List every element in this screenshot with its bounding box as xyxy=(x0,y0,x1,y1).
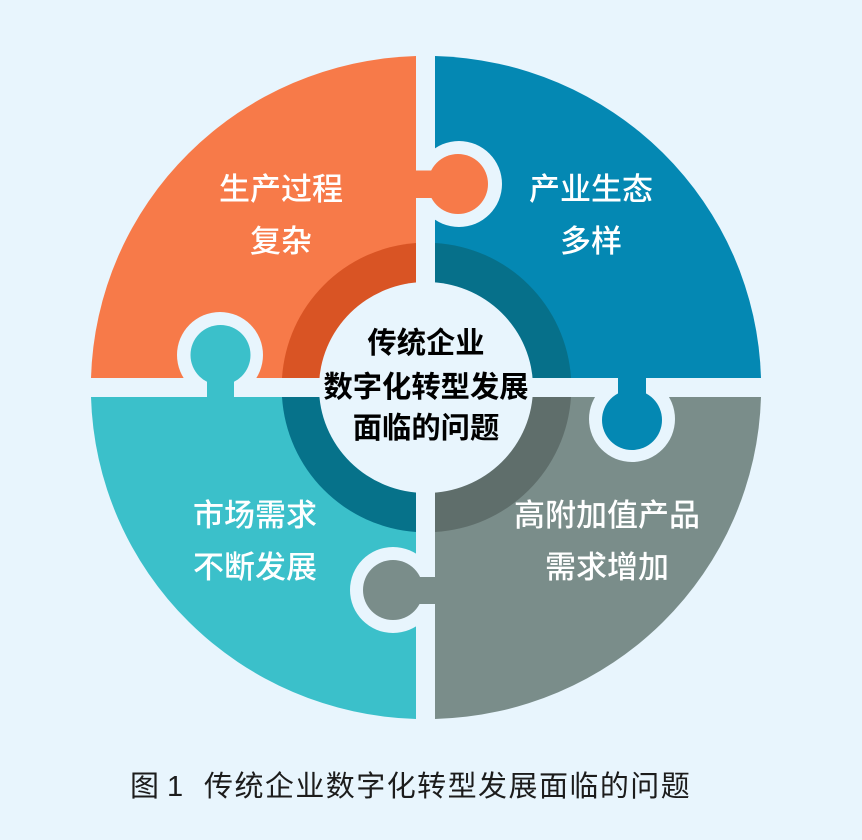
center circle xyxy=(319,282,533,493)
caption: 传统企业数字化转型发展面临的问题 xyxy=(204,770,691,803)
icon: cyan puzzle knob xyxy=(190,325,250,399)
label: market demand: 不断发展 xyxy=(193,550,317,585)
center text: 传统企业 xyxy=(367,327,485,360)
label: high value products: 需求增加 xyxy=(545,550,669,585)
label: high value products: 高附加值产品 xyxy=(514,498,700,533)
label: market demand xyxy=(193,498,317,585)
label: industry ecosystem: 产业生态 xyxy=(529,172,653,207)
label: production process: 生产过程 xyxy=(219,172,343,207)
icon: orange puzzle knob xyxy=(414,154,488,214)
label: industry ecosystem xyxy=(529,172,653,259)
label: production process xyxy=(219,172,343,259)
icon: blue puzzle knob xyxy=(602,376,662,450)
panel: grey quadrant xyxy=(435,376,761,719)
center text: 面临的问题 xyxy=(353,412,499,445)
label: production process: 复杂 xyxy=(250,224,312,259)
icon: grey puzzle knob xyxy=(363,560,437,620)
caption: 图 xyxy=(130,771,159,803)
label: industry ecosystem: 多样 xyxy=(560,224,622,259)
panel: cyan quadrant xyxy=(91,397,436,719)
center text: 数字化转型发展 xyxy=(323,371,529,404)
panel: blue quadrant xyxy=(416,56,761,378)
panel: orange quadrant xyxy=(91,56,416,398)
label: market demand: 市场需求 xyxy=(193,498,317,533)
puzzle diagram xyxy=(91,56,761,719)
label: high value products xyxy=(514,498,700,585)
center text xyxy=(323,327,529,445)
caption: 1 xyxy=(167,771,183,803)
